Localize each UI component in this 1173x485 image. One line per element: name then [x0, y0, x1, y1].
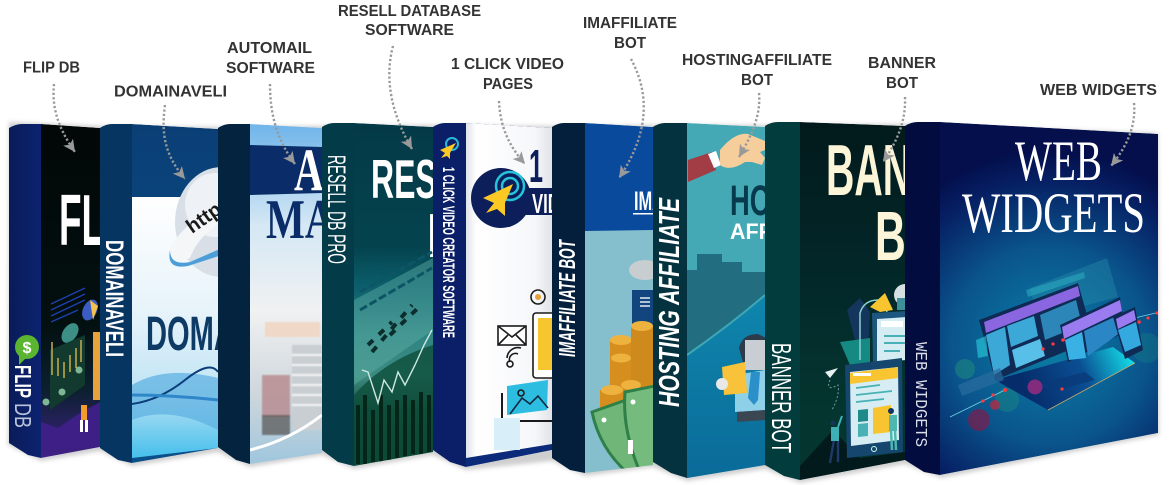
cover: Resell DB Pro: DB: [428, 202, 473, 271]
cover: Banner Bot: BANNER: [826, 131, 994, 211]
label: Automail Software: SOFTWARE: [226, 60, 315, 77]
chart illustration: [42, 288, 101, 432]
cover: Automail: [250, 124, 322, 464]
cover: Resell DB Pro: [354, 123, 433, 466]
spine: DomainAveli: DOMAINAVELI: [100, 240, 128, 357]
spine: Resell DB Pro: [322, 123, 354, 466]
spine: 1 Click Video: [433, 123, 466, 467]
label: HostingAffiliate Bot: HOSTINGAFFILIATE: [682, 52, 832, 69]
cover: DomainAveli: [132, 124, 218, 463]
icon: dollar badge: [15, 335, 39, 365]
icon: reaching hand: [688, 134, 765, 182]
label: Automail Software: [226, 40, 315, 77]
label: Automail Software: AUTOMAIL: [227, 40, 312, 57]
spine: Flip DB: DB: [10, 403, 36, 428]
spine: 1 Click Video: 1 CLICK VIDEO CREATOR SOFTWARE: [439, 167, 458, 338]
arrow: Hosting Affiliate: [739, 93, 759, 157]
arrow: Banner Bot: [883, 97, 905, 162]
arrow: IMAffiliate: [619, 59, 644, 178]
spine: Web Widgets: [905, 122, 940, 475]
cover: IMAffiliate Bot: IMAFF: [634, 186, 684, 216]
arrow: 1 Click Video: [499, 101, 525, 164]
label: IMAffiliate Bot: BOT: [614, 35, 647, 52]
cover: Hosting Affiliate: HOST: [730, 177, 806, 225]
box: Automail: [218, 124, 322, 464]
label: Banner Bot: BANNER: [868, 55, 936, 72]
label: Resell Database Software: SOFTWARE: [365, 22, 454, 39]
cover: Web Widgets: [940, 122, 1162, 475]
spine: Resell DB Pro: RESELL DB PRO: [322, 155, 350, 264]
cover: Banner Bot: [800, 122, 905, 480]
icon: globe with http ribbon: http: [182, 198, 226, 238]
box shadows: [8, 122, 1159, 483]
label: Banner Bot: [868, 55, 936, 92]
cover: Banner Bot: BOT: [875, 197, 965, 275]
spine: Web Widgets: WEB WIDGETS: [911, 342, 930, 447]
coins, chimney and money: [590, 260, 653, 469]
waves: [132, 368, 218, 430]
label: Web Widgets: WEB WIDGETS: [1040, 82, 1157, 99]
label: HostingAffiliate Bot: [682, 52, 832, 89]
coin stacks: [262, 322, 322, 435]
laptop with screens illustration: [950, 258, 1162, 431]
cover: Automail: AUTO: [294, 137, 412, 203]
label: DomainAveli: DOMAINAVELI: [114, 84, 227, 100]
cover: Hosting Affiliate: AFFILIATE: [730, 219, 838, 244]
arrow: Flip DB: [54, 84, 75, 152]
cover: Automail: MAIL: [266, 189, 378, 251]
creator illustration: [497, 289, 552, 422]
spine: Automail: [218, 124, 250, 464]
icon: globe with http ribbon: [169, 167, 218, 277]
cover: Hosting Affiliate: [687, 123, 765, 478]
arrow: Automail: [270, 84, 295, 164]
arrow: DomainAveli: [164, 105, 185, 179]
label: Resell Database Software: [338, 3, 481, 39]
icon: small cursor: [440, 138, 458, 159]
cover: Web Widgets: WEB: [1015, 130, 1102, 193]
label: HostingAffiliate Bot: BOT: [741, 72, 774, 89]
label: IMAffiliate Bot: [583, 15, 677, 52]
spine: IMAffiliate Bot: [552, 123, 585, 473]
box: Flip DB: [9, 124, 100, 458]
box: Hosting Affiliate: [653, 123, 765, 478]
arrow: Resell: [389, 46, 412, 149]
spine: Flip DB: [9, 124, 41, 458]
label: Banner Bot: BOT: [886, 75, 919, 92]
cover: Flip DB: [41, 124, 100, 458]
cover: 1 Click Video: [466, 123, 552, 467]
box: DomainAveli: [100, 124, 218, 463]
box: 1 Click Video: [433, 123, 552, 467]
spine: Hosting Affiliate: HOSTING AFFILIATE: [654, 197, 686, 407]
icon: cursor badge: [471, 168, 552, 228]
dollar bill and stock chart: [354, 252, 433, 466]
label: 1 Click Video Pages: PAGES: [483, 76, 533, 93]
box: Resell DB Pro: [322, 123, 433, 466]
person with folder: [716, 334, 770, 422]
box: Web Widgets: [905, 122, 1162, 475]
cover: 1 Click Video: 1: [529, 140, 543, 192]
icon: cursor badge: VIDEO: [532, 188, 584, 219]
label: IMAffiliate Bot: IMAFFILIATE: [583, 15, 677, 32]
spine: Flip DB: FLIP: [10, 365, 36, 398]
banner illustration: [825, 284, 905, 464]
label: 1 Click Video Pages: 1 CLICK VIDEO: [451, 56, 564, 73]
cover: DomainAveli: DOMAIN: [146, 308, 264, 361]
spine: Banner Bot: [765, 122, 800, 480]
cover: Resell DB Pro: RESELL: [371, 148, 497, 210]
cover: IMAffiliate Bot: [585, 123, 653, 473]
label: Resell Database Software: RESELL DATABASE: [338, 3, 481, 20]
label: Flip DB: FLIP DB: [23, 60, 80, 76]
icon: dollar badge: $: [23, 340, 32, 357]
box: IMAffiliate Bot: [552, 123, 653, 473]
spine: IMAffiliate Bot: IMAFFILIATE BOT: [554, 239, 580, 357]
box: Banner Bot: [765, 122, 905, 480]
arrow: Web Widgets: [1111, 103, 1134, 166]
cover: Flip DB: FLIP: [59, 181, 139, 261]
label: 1 Click Video Pages: [451, 56, 564, 93]
spine: DomainAveli: [100, 124, 132, 463]
